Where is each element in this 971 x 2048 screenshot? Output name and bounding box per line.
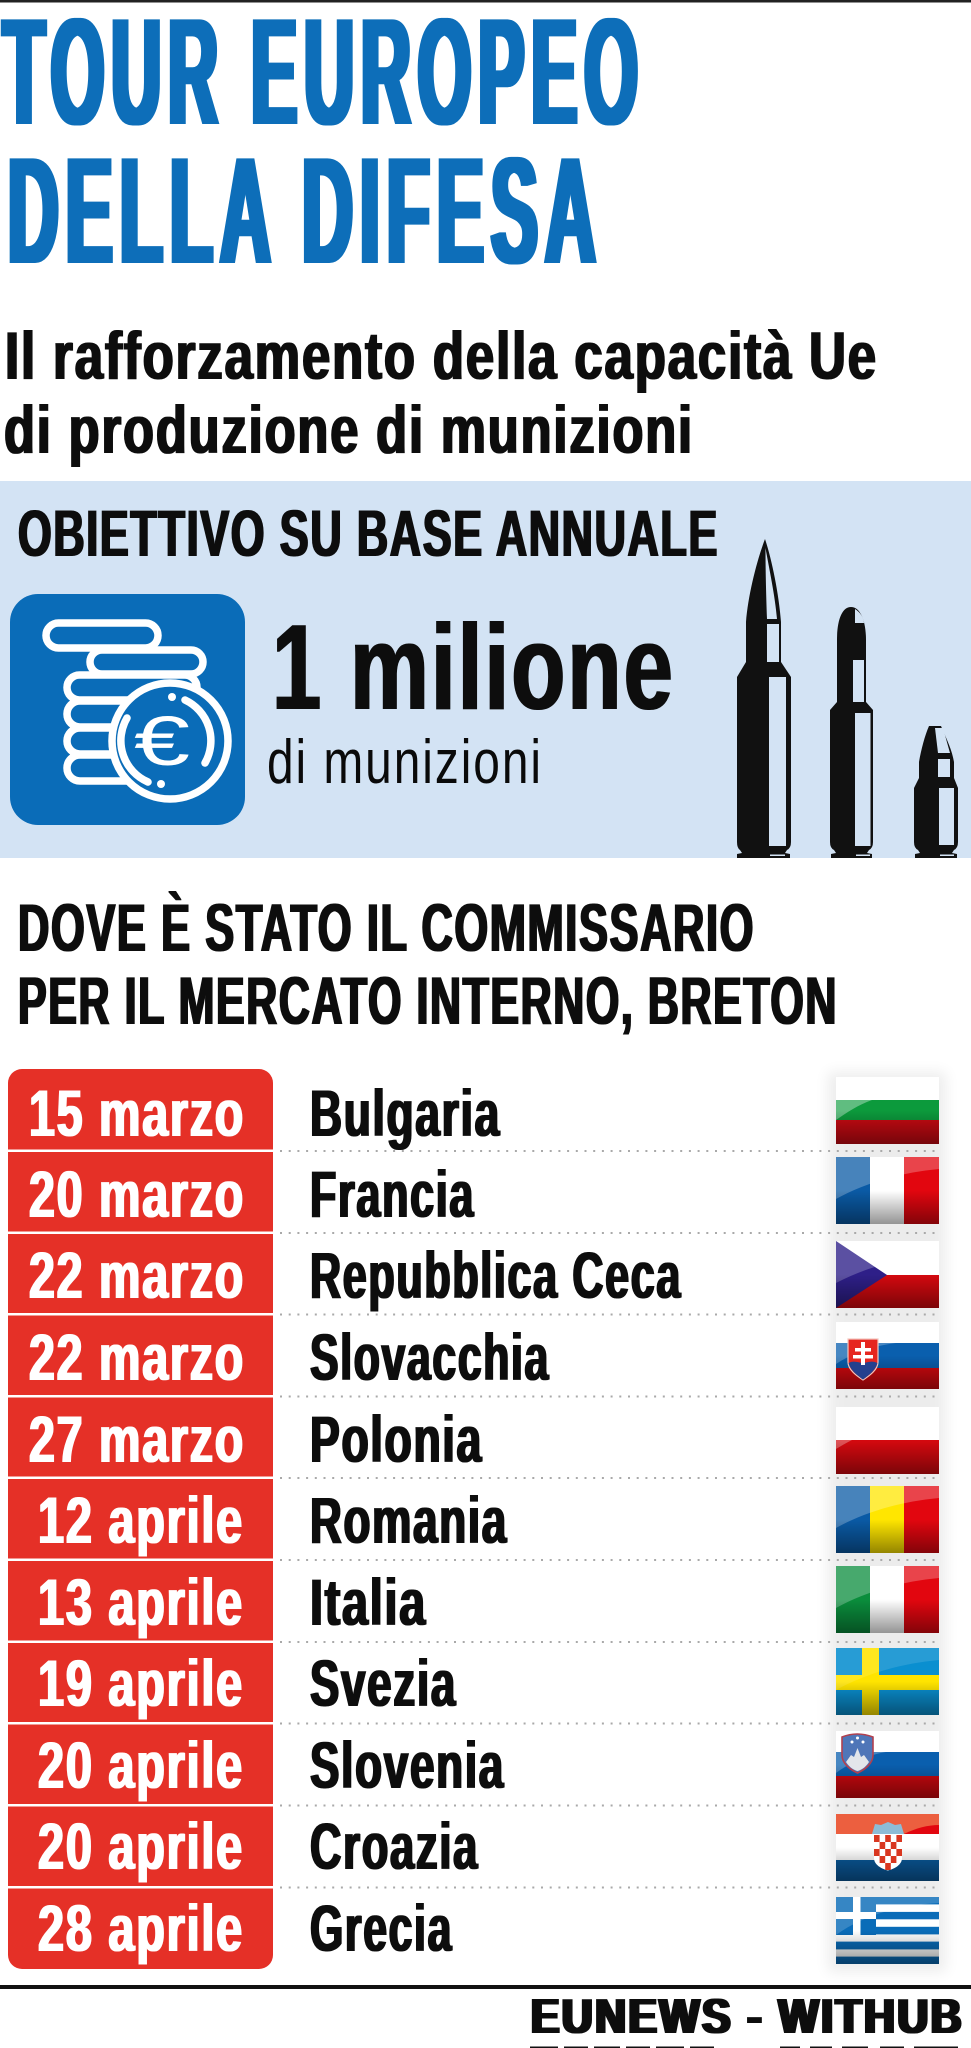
row: Grecia bbox=[38, 1891, 939, 1965]
date: 22 marzo bbox=[29, 1238, 245, 1312]
row: Italia bbox=[38, 1565, 939, 1639]
flag: Italy bbox=[836, 1566, 939, 1633]
flag: Slovakia bbox=[836, 1322, 939, 1389]
country: Grecia bbox=[310, 1891, 453, 1965]
country: Repubblica Ceca bbox=[310, 1238, 682, 1312]
row: Slovenia bbox=[38, 1728, 939, 1802]
country: Croazia bbox=[310, 1809, 479, 1883]
row: Svezia bbox=[38, 1646, 939, 1720]
cropped second credit line bbox=[530, 2046, 958, 2048]
country: Polonia bbox=[310, 1402, 483, 1476]
date: 28 aprile bbox=[38, 1891, 244, 1965]
country: Francia bbox=[310, 1157, 475, 1231]
date: 19 aprile bbox=[38, 1646, 244, 1720]
row: Polonia bbox=[29, 1402, 939, 1476]
country: Bulgaria bbox=[310, 1076, 501, 1150]
flag: Sweden bbox=[836, 1648, 939, 1715]
bottom rule bbox=[0, 1985, 971, 1989]
flag column shadow bbox=[828, 1072, 946, 1972]
date: 12 aprile bbox=[38, 1483, 244, 1557]
country: Romania bbox=[310, 1483, 508, 1557]
date: 13 aprile bbox=[38, 1565, 244, 1639]
country: Italia bbox=[310, 1565, 427, 1639]
icon: coins with euro: € bbox=[134, 702, 190, 780]
date: 20 aprile bbox=[38, 1809, 244, 1883]
panel: annual target bbox=[0, 481, 971, 858]
row: Bulgaria bbox=[29, 1076, 939, 1150]
subtitle: di produzione di munizioni bbox=[4, 392, 694, 468]
unit label: di munizioni bbox=[267, 728, 543, 797]
date: 22 marzo bbox=[29, 1320, 245, 1394]
title bbox=[3, 0, 645, 296]
icon: long bullet bbox=[737, 539, 791, 858]
flag: Greece bbox=[836, 1897, 939, 1964]
flag: France bbox=[836, 1157, 939, 1224]
icon: medium bullet bbox=[830, 607, 873, 858]
flag: Romania bbox=[836, 1486, 939, 1553]
country: Svezia bbox=[310, 1646, 457, 1720]
top rule bbox=[0, 0, 971, 2]
icon: coins with euro bbox=[10, 594, 245, 825]
big number: 1 milione bbox=[272, 599, 675, 735]
flag: Czech Republic bbox=[836, 1241, 939, 1308]
row: Francia bbox=[29, 1157, 939, 1231]
date: 20 marzo bbox=[29, 1157, 245, 1231]
flag: Poland bbox=[836, 1407, 939, 1474]
date: 27 marzo bbox=[29, 1402, 245, 1476]
country: Slovacchia bbox=[310, 1320, 550, 1394]
flag: Slovenia bbox=[836, 1731, 939, 1798]
country: Slovenia bbox=[310, 1728, 505, 1802]
row: Slovacchia bbox=[29, 1320, 939, 1394]
panel background bbox=[0, 481, 971, 858]
row: Romania bbox=[38, 1483, 939, 1557]
date: 15 marzo bbox=[29, 1076, 245, 1150]
date column background bbox=[8, 1069, 940, 1969]
row: Croazia bbox=[38, 1809, 939, 1883]
icon: short bullet bbox=[914, 726, 958, 858]
flag: Bulgaria bbox=[836, 1077, 939, 1144]
flag: Croatia bbox=[836, 1814, 939, 1881]
section heading bbox=[18, 890, 838, 1039]
row: Repubblica Ceca bbox=[29, 1238, 939, 1312]
subtitle bbox=[4, 318, 878, 468]
date: 20 aprile bbox=[38, 1728, 244, 1802]
